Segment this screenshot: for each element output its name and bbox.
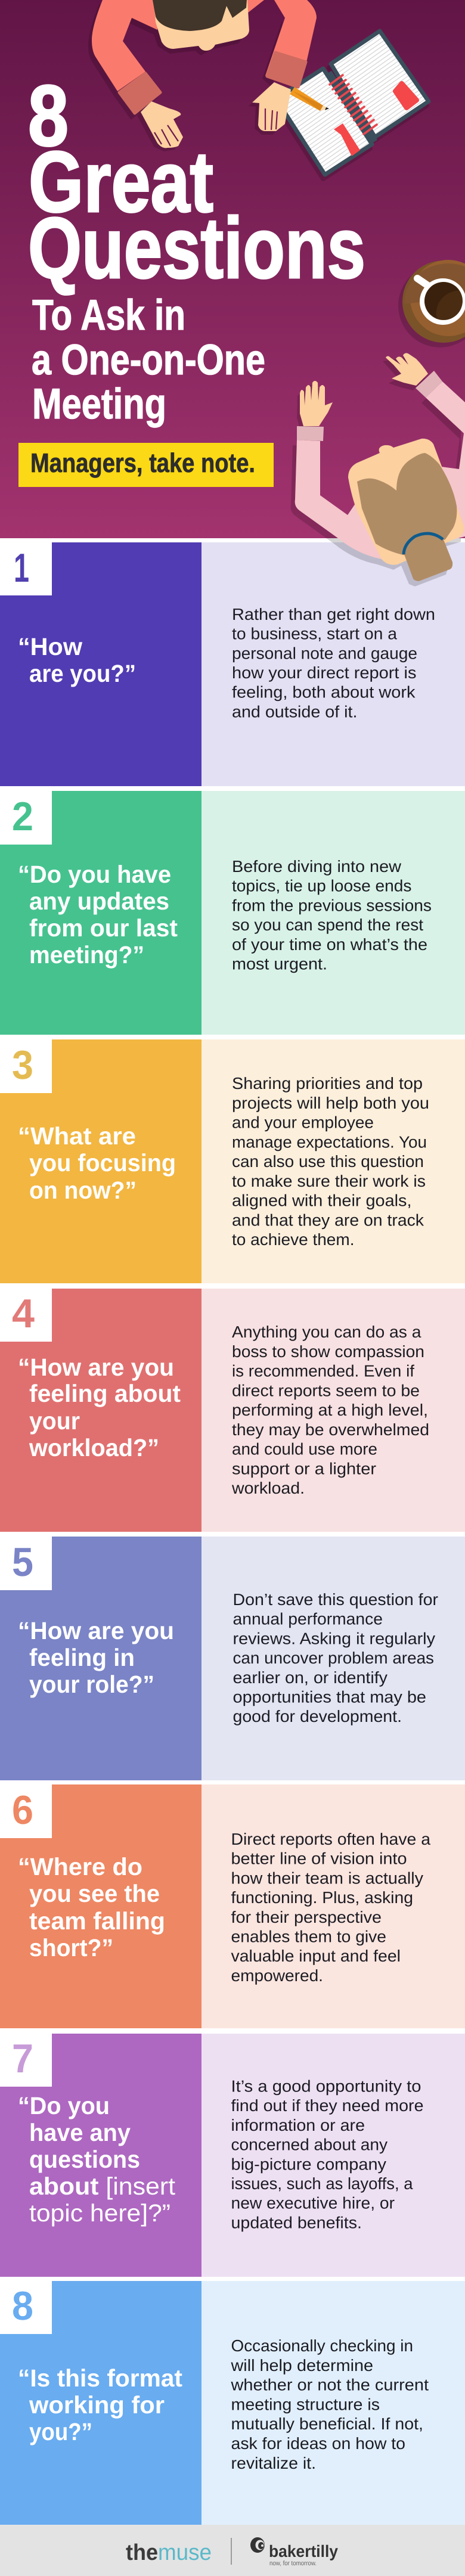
question 3 text: you focusing xyxy=(29,1149,176,1177)
question 7 text: “Do you xyxy=(18,2092,110,2119)
answer 3 text: manage expectations. You xyxy=(232,1132,427,1151)
answer 5 text: earlier on, or identify xyxy=(232,1668,388,1687)
answer 7 text: updated benefits. xyxy=(231,2213,362,2232)
answer 7 text: big-picture company xyxy=(231,2155,386,2173)
logo: baker tilly xyxy=(250,2537,338,2567)
answer 4 text: and could use more xyxy=(232,1440,377,1458)
answer 1 text: Rather than get right down xyxy=(232,605,435,623)
answer 5 text: Don’t save this question for xyxy=(232,1590,438,1609)
answer 2 text: topics, tie up loose ends xyxy=(232,877,411,895)
answer 7 text: It’s a good opportunity to xyxy=(231,2077,421,2096)
subtitle xyxy=(32,291,265,428)
answer 3 text: and that they are on track xyxy=(232,1211,424,1229)
answer 4 text xyxy=(231,1323,429,1497)
question 8 text: “Is this format xyxy=(18,2364,182,2392)
answer 8 text: Occasionally checking in xyxy=(231,2336,413,2355)
number tab 8: 8 xyxy=(12,2283,33,2329)
question 2 text: “Do you have xyxy=(18,861,171,888)
subtitle: a One-on-One xyxy=(32,336,265,384)
question 4 text: workload?” xyxy=(29,1434,159,1461)
answer 2 text: Before diving into new xyxy=(232,857,401,876)
answer 4 text: boss to show compassion xyxy=(232,1342,424,1361)
logo: the muse: the xyxy=(126,2540,158,2565)
question 8 text: working for xyxy=(29,2391,165,2419)
question 6 text: short?” xyxy=(29,1934,113,1962)
answer 5 text: good for development. xyxy=(232,1707,402,1725)
callout: managers take note xyxy=(18,443,274,487)
question 2 text: any updates xyxy=(29,887,169,915)
answer 8 text: ask for ideas on how to xyxy=(231,2434,405,2453)
illustration: notebook xyxy=(274,31,429,179)
panel: question 7 xyxy=(0,2034,465,2277)
subtitle: Meeting xyxy=(32,380,166,428)
answer 8 text: whether or not the current xyxy=(230,2376,429,2394)
answer 4 text: is recommended. Even if xyxy=(232,1361,414,1380)
answer 3 text: and your employee xyxy=(232,1113,374,1131)
question 6 text: team falling xyxy=(29,1907,165,1935)
answer 5 text: can uncover problem areas xyxy=(232,1649,434,1667)
answer 2 text: most urgent. xyxy=(232,955,327,973)
answer 5 text: opportunities that may be xyxy=(232,1688,426,1706)
number tab 3 xyxy=(0,1039,52,1093)
subtitle: To Ask in xyxy=(32,291,185,339)
question 6 text xyxy=(18,1853,165,1962)
number tab 5 xyxy=(0,1537,52,1590)
answer 6 text: Direct reports often have a xyxy=(231,1830,431,1848)
question 2 text: from our last xyxy=(29,914,178,942)
answer 8 text xyxy=(230,2336,429,2472)
number tab 7 xyxy=(0,2034,52,2087)
number tab 4 xyxy=(0,1289,52,1342)
answer 2 text: of your time on what’s the xyxy=(232,935,427,954)
panel: question 6 xyxy=(0,1784,465,2028)
answer 8 text: revitalize it. xyxy=(231,2454,316,2472)
footer bar xyxy=(0,2525,465,2576)
answer 1 text: personal note and gauge xyxy=(232,644,417,662)
answer 3 text: can also use this question xyxy=(232,1152,424,1171)
answer 1 text: to business, start on a xyxy=(232,625,398,643)
number tab 4: 4 xyxy=(12,1291,35,1336)
answer 5 text xyxy=(232,1590,438,1725)
number tab 8 xyxy=(0,2281,52,2334)
number tab 1 xyxy=(0,542,52,595)
answer 1 text: feeling, both about work xyxy=(232,683,416,702)
panel: question 4 xyxy=(0,1289,465,1532)
logo: baker tilly: bakertilly xyxy=(269,2542,338,2561)
panel: question 3 xyxy=(0,1039,465,1283)
answer 4 text: performing at a high level, xyxy=(232,1401,428,1419)
number tab 2: 2 xyxy=(12,794,33,839)
answer 6 text: better line of vision into xyxy=(231,1849,407,1868)
question 7 text: topic here]?” xyxy=(29,2199,170,2227)
answer 3 text: to achieve them. xyxy=(232,1230,354,1249)
header background xyxy=(0,0,465,538)
panel: question 1 xyxy=(0,542,465,786)
answer 6 text: enables them to give xyxy=(231,1928,386,1945)
question 5 text: feeling in xyxy=(29,1644,135,1671)
answer 2 text: so you can spend the rest xyxy=(232,915,423,934)
number tab 7: 7 xyxy=(12,2036,33,2081)
answer 7 text: issues, such as layoffs, a xyxy=(231,2174,413,2193)
question 6 text: “Where do xyxy=(18,1853,142,1880)
illustration: coffee cup xyxy=(398,260,465,347)
number tab 6 xyxy=(0,1784,52,1838)
logo: the muse: muse xyxy=(158,2540,212,2565)
answer 3 text: projects will help both you xyxy=(232,1094,429,1112)
logo: the muse xyxy=(126,2540,212,2565)
answer 7 text: new executive hire, or xyxy=(231,2194,395,2212)
question 5 text xyxy=(18,1617,174,1698)
question 4 text: your xyxy=(29,1407,80,1435)
answer 5 text: reviews. Asking it regularly xyxy=(232,1629,435,1647)
callout: managers take note: Managers, take note. xyxy=(30,448,255,478)
answer 6 text: how their team is actually xyxy=(231,1869,423,1887)
answer 7 text: information or are xyxy=(231,2116,365,2134)
title xyxy=(28,67,365,296)
answer 6 text: valuable input and feel xyxy=(231,1947,401,1965)
answer 1 text: and outside of it. xyxy=(232,702,358,721)
answer 8 text: mutually beneficial. If not, xyxy=(231,2414,423,2433)
question 2 text xyxy=(18,861,178,969)
question 1 text: are you?” xyxy=(29,660,136,687)
question 7 text: about [insert xyxy=(29,2172,176,2200)
logo: baker tilly: now, for tomorrow. xyxy=(269,2560,317,2567)
question 3 text: on now?” xyxy=(29,1177,137,1204)
answer 4 text: they may be overwhelmed xyxy=(232,1420,429,1439)
title: Great xyxy=(29,134,213,230)
number tab 1: 1 xyxy=(14,545,29,591)
answer 4 text: Anything you can do as a xyxy=(232,1323,421,1341)
number tab 5: 5 xyxy=(12,1540,33,1585)
answer 6 text: functioning. Plus, asking xyxy=(231,1888,413,1907)
answer 2 text: from the previous sessions xyxy=(232,896,432,914)
question 4 text: feeling about xyxy=(29,1380,181,1407)
number tab 3: 3 xyxy=(12,1042,33,1088)
answer 6 text: for their perspective xyxy=(231,1908,382,1926)
illustration: man at the top xyxy=(88,0,317,151)
answer 7 text: find out if they need more xyxy=(231,2096,423,2115)
illustration: woman at the table xyxy=(291,353,465,586)
answer 3 text: Sharing priorities and top xyxy=(232,1074,423,1093)
answer 3 text: aligned with their goals, xyxy=(232,1191,411,1210)
answer 4 text: direct reports seem to be xyxy=(232,1381,420,1399)
answer 1 text xyxy=(232,605,435,721)
question 5 text: your role?” xyxy=(29,1671,154,1698)
answer 1 text: how your direct report is xyxy=(232,663,416,682)
question 7 text: questions xyxy=(29,2146,140,2173)
question 5 text: “How are you xyxy=(18,1617,174,1644)
question 4 text: “How are you xyxy=(18,1354,174,1381)
panel: question 2 xyxy=(0,791,465,1035)
question 1 text xyxy=(18,633,136,687)
question 7 text: have any xyxy=(29,2119,131,2146)
panel: question 5 xyxy=(0,1537,465,1780)
title: 8 xyxy=(28,67,69,164)
panel: question 8 xyxy=(0,2281,465,2525)
question 4 text xyxy=(18,1354,181,1461)
answer 4 text: workload. xyxy=(231,1479,305,1497)
question 2 text: meeting?” xyxy=(29,941,144,969)
answer 8 text: will help determine xyxy=(230,2356,373,2375)
question 8 text xyxy=(18,2364,182,2445)
question 1 text: “How xyxy=(18,633,82,660)
answer 8 text: meeting structure is xyxy=(231,2395,380,2413)
answer 7 text xyxy=(231,2077,423,2232)
answer 3 text: to make sure their work is xyxy=(232,1172,426,1190)
question 3 text: “What are xyxy=(18,1122,136,1150)
answer 5 text: annual performance xyxy=(232,1610,383,1628)
question 6 text: you see the xyxy=(29,1880,160,1907)
answer 6 text: empowered. xyxy=(231,1966,323,1985)
icon: swirl xyxy=(250,2537,265,2553)
question 7 text xyxy=(18,2092,176,2227)
answer 6 text xyxy=(231,1830,431,1985)
answer 7 text: concerned about any xyxy=(231,2136,388,2154)
answer 4 text: support or a lighter xyxy=(232,1459,376,1478)
question 8 text: you?” xyxy=(29,2418,92,2445)
question 3 text xyxy=(18,1122,176,1204)
title: Questions xyxy=(28,200,365,296)
answer 2 text xyxy=(232,857,432,973)
number tab 6: 6 xyxy=(12,1787,33,1833)
answer 3 text xyxy=(232,1074,429,1249)
number tab 2 xyxy=(0,791,52,845)
